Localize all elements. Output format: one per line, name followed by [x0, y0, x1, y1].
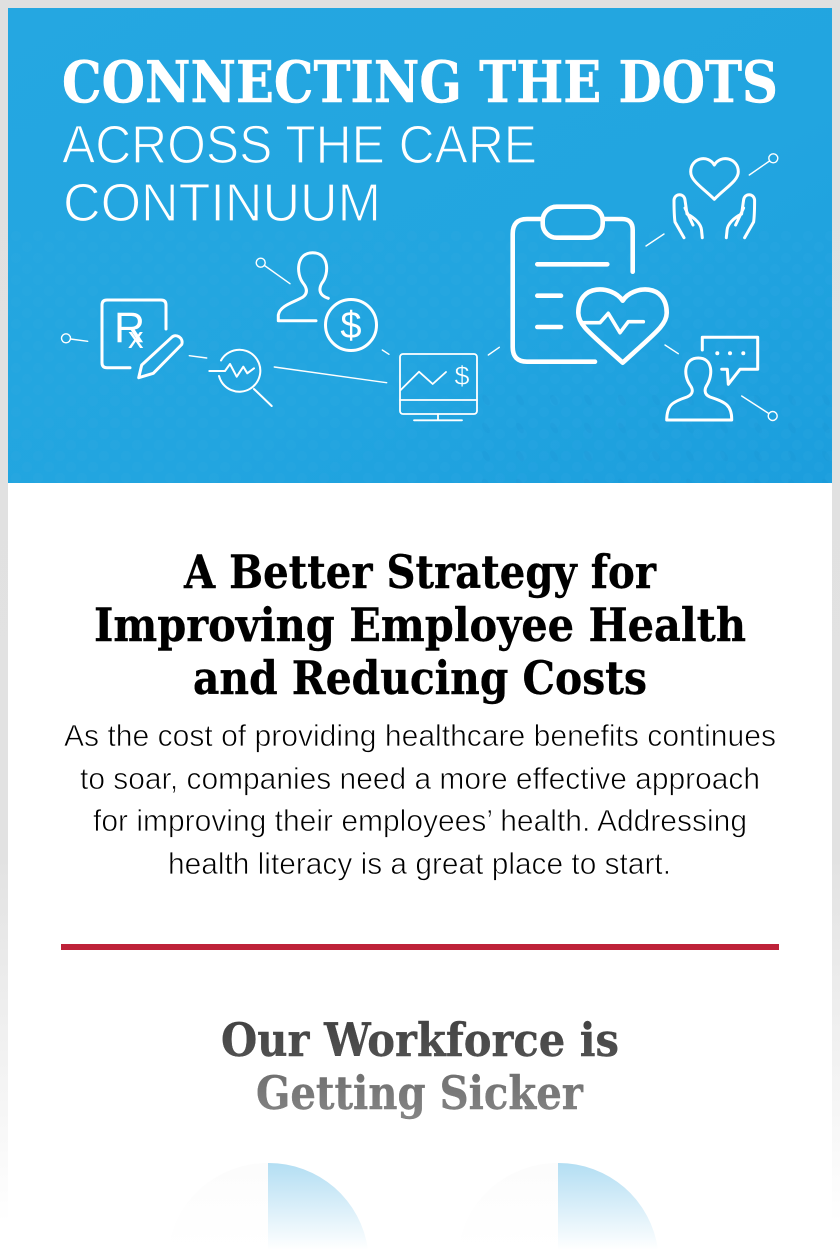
icon: monitor with chart [400, 347, 499, 420]
header title [62, 49, 778, 233]
intro paragraph: for improving their employees’ health. Addressing [93, 804, 747, 838]
heading: better strategy: Improving Employee Health [94, 598, 746, 652]
icon: monitor with chart: $ [454, 361, 470, 391]
intro paragraph [64, 719, 776, 881]
heading: better strategy: and Reducing Costs [193, 651, 647, 705]
header title: CONTINUUM [63, 173, 381, 233]
heading: workforce: Our Workforce is [221, 1013, 619, 1067]
icon: prescription and pencil [62, 300, 182, 378]
heading: workforce: Getting Sicker [256, 1066, 584, 1120]
icon: magnifier with pulse [189, 350, 387, 406]
heading: workforce [221, 1013, 619, 1120]
heading: better strategy: A Better Strategy for [183, 545, 657, 599]
pie chart left [168, 1163, 368, 1250]
icon: person and dollar [256, 253, 389, 354]
pie chart right [458, 1163, 658, 1250]
header title: ACROSS THE CARE [62, 115, 537, 175]
icon: prescription and pencil: x [128, 320, 144, 355]
intro paragraph: health literacy is a great place to start. [168, 847, 671, 881]
panel: blue header [8, 8, 832, 483]
heading: better strategy [94, 545, 746, 705]
red divider [61, 944, 779, 950]
icon: person with speech bubble [665, 337, 777, 420]
icon: clipboard with heart [513, 207, 667, 363]
icon: person and dollar: $ [340, 305, 362, 347]
icon: hands holding heart [646, 154, 778, 246]
icon: prescription and pencil: R [114, 304, 145, 352]
intro paragraph: As the cost of providing healthcare benefits continues [64, 719, 776, 753]
intro paragraph: to soar, companies need a more effective approach [80, 762, 760, 796]
